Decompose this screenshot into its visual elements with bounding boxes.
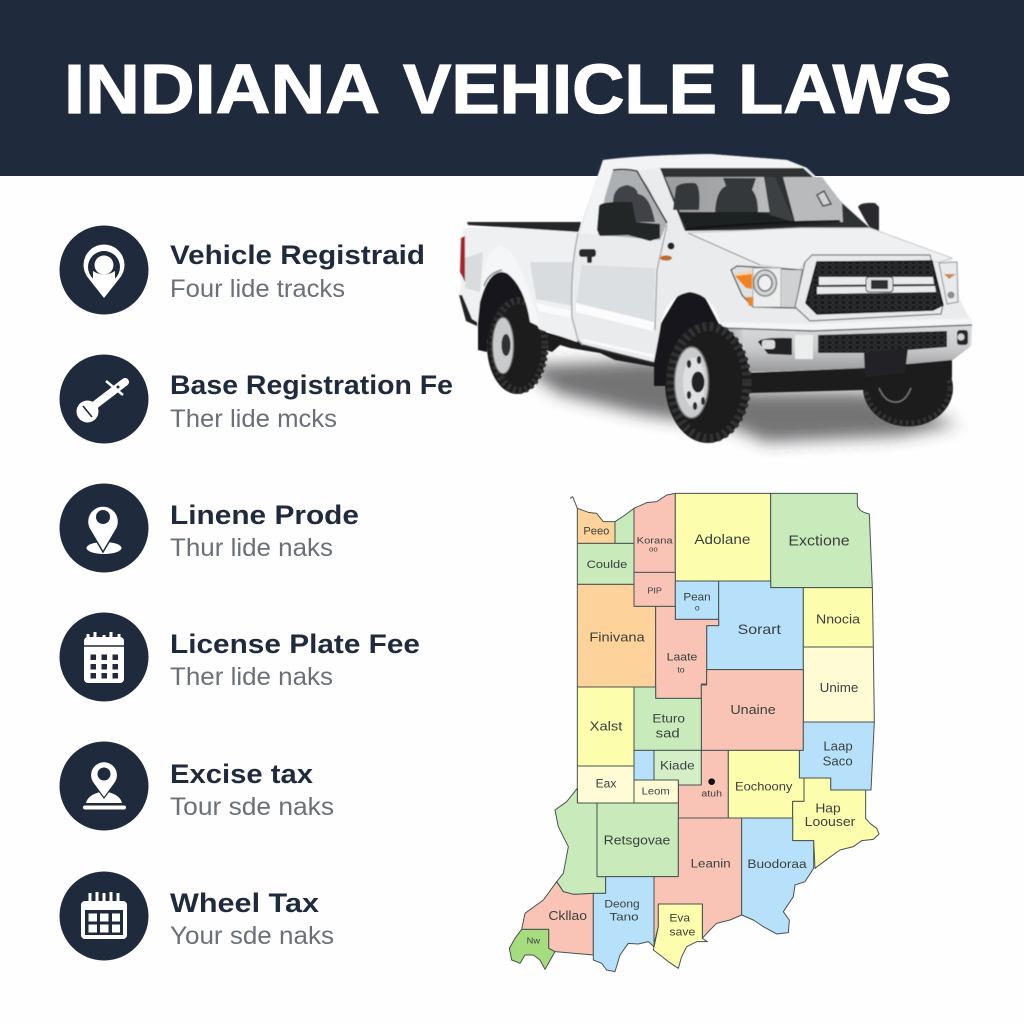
item text: Linene Prode: [170, 500, 359, 530]
map of Indiana counties: to: [677, 664, 685, 674]
map of Indiana counties: Leom: [642, 787, 670, 798]
map of Indiana counties: oo: [649, 545, 658, 554]
map of Indiana counties: Saco: [823, 754, 853, 768]
map of Indiana counties: Coulde: [587, 559, 627, 571]
map of Indiana counties: Adolane: [694, 531, 751, 547]
list item: Linene Prode: [60, 484, 359, 572]
icon: pin on base: [60, 742, 148, 830]
rear wheel: [487, 297, 547, 394]
list item: License Plate Fee: Ther lide naks: [170, 663, 333, 691]
list item: Vehicle Registraid: Four lide tracks: [170, 275, 345, 303]
map of Indiana counties: Peeo: [583, 526, 609, 538]
map of Indiana counties: Nnocia: [816, 612, 861, 626]
side window: [598, 169, 667, 240]
map of Indiana counties: Sorart: [738, 621, 781, 637]
headlight: [731, 266, 802, 308]
item text: Vehicle Registraid: [170, 240, 425, 270]
right headlight: [939, 262, 958, 304]
list item: Vehicle Registraid: [60, 226, 425, 314]
map of Indiana counties: Leanin: [691, 856, 731, 870]
hood: [688, 228, 952, 270]
map of Indiana counties: Tano: [609, 912, 639, 924]
item text: Base Registration Fe: [170, 370, 453, 400]
map of Indiana counties: Eva: [669, 912, 691, 924]
list item: Wheel Tax: [60, 872, 334, 960]
map of Indiana counties: Buodoraa: [747, 857, 807, 871]
license plate: [864, 348, 908, 377]
icon: calendar grid: [60, 612, 148, 702]
windshield: [660, 168, 870, 231]
title: VEHICLE: [403, 50, 717, 128]
far mirror: [858, 203, 879, 235]
map of Indiana counties: atuh: [701, 789, 722, 799]
cab and front body: [572, 154, 972, 375]
list item: Wheel Tax: Your sde naks: [170, 922, 334, 950]
map of Indiana counties: Finivana: [589, 629, 645, 644]
map of Indiana counties: Xalst: [590, 719, 623, 734]
item text: Excise tax: [170, 759, 313, 789]
list item: Excise tax: Tour sde naks: [170, 793, 334, 821]
pickup truck illustration: [459, 154, 972, 443]
map of Indiana counties: Laate: [667, 652, 697, 664]
map of Indiana counties: Eturo: [652, 711, 685, 725]
far front wheel: [863, 350, 953, 426]
list item: Linene Prode: Thur lide naks: [170, 534, 333, 562]
map of Indiana counties: Unime: [820, 681, 858, 695]
grille: [795, 255, 943, 321]
map of Indiana counties: Hap: [815, 802, 841, 816]
list item: Base Registration Fee: Ther lide mcks: [170, 405, 337, 433]
map of Indiana counties: save: [669, 926, 695, 938]
map of Indiana counties: Ckllao: [548, 909, 587, 923]
side mirror: [597, 202, 660, 241]
map of Indiana counties: Unaine: [730, 702, 776, 717]
map of Indiana counties: Deong: [604, 898, 640, 910]
map of Indiana counties: Loouser: [805, 815, 855, 829]
map of Indiana counties: PIP: [647, 586, 662, 595]
icon: location pin with person: [60, 226, 148, 314]
map of Indiana counties: Retsgovae: [604, 834, 670, 848]
lower valance: [740, 360, 952, 393]
icon: key tool: [60, 354, 148, 444]
title: LAWS: [738, 50, 952, 128]
map of Indiana counties: Pean: [683, 592, 711, 604]
item text: Wheel Tax: [170, 888, 319, 918]
map of Indiana counties: sad: [656, 726, 680, 741]
map of Indiana counties: Exctione: [788, 533, 850, 549]
item text: License Plate Fee: [170, 629, 420, 659]
map of Indiana counties: o: [695, 603, 700, 613]
title: INDIANA: [64, 50, 380, 128]
truck bed: [459, 226, 586, 342]
front bumper: [722, 318, 972, 372]
map of Indiana counties: Eochoony: [735, 781, 793, 794]
bed rail: [467, 222, 581, 232]
door handle: [579, 249, 596, 263]
map of Indiana counties: [509, 493, 879, 972]
icon: calendar outline: [60, 872, 148, 960]
rear bumper strip: [459, 295, 477, 326]
list item: Base Registration Fee: [60, 354, 453, 444]
list item: License Plate Fee: [60, 612, 420, 702]
list item: Excise tax: [60, 742, 334, 830]
map of Indiana counties: Korana: [637, 535, 673, 545]
map of Indiana counties: Nw: [527, 935, 541, 945]
near front wheel: [665, 322, 750, 443]
title: [64, 50, 952, 128]
map of Indiana counties: Eax: [596, 777, 617, 790]
tail light: [460, 236, 465, 282]
header banner: [0, 0, 1024, 176]
map of Indiana counties: Laap: [823, 740, 853, 754]
icon: map pin: [60, 484, 148, 572]
map of Indiana counties: Kiade: [660, 759, 695, 772]
